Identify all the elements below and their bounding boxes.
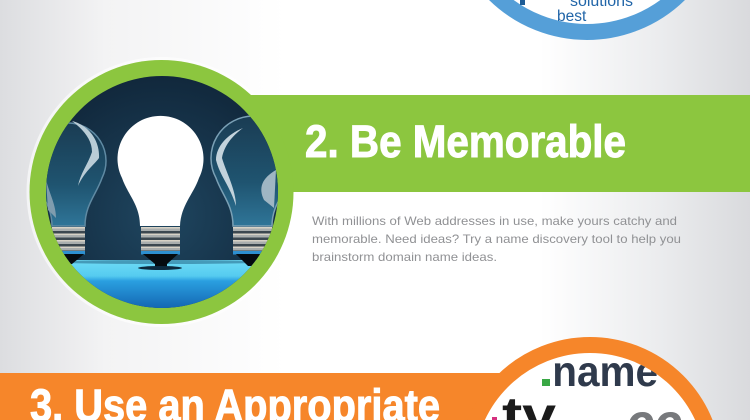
left dim bulb (46, 121, 107, 264)
body text: brainstorm domain name ideas. (312, 250, 497, 264)
floor glow (68, 260, 256, 308)
circle halo (26, 57, 296, 327)
domain: .tv (492, 399, 556, 420)
blue circle: previous section (455, 0, 719, 32)
heading: 2. Be Memorable: 2. Be Memorable (305, 116, 626, 167)
centre lit bulb (118, 116, 204, 270)
green heading band (230, 95, 750, 192)
body text: With millions of Web addresses in use, make yours catchy and (312, 214, 677, 228)
cloud word: best: best (557, 8, 587, 25)
body text: memorable. Need ideas? Try a name discovery tool to help you (312, 232, 681, 246)
body text (312, 214, 681, 264)
domain: .name: .name (541, 348, 658, 396)
orange circle with domain extensions (466, 345, 714, 420)
green circle with light bulb photo (30, 60, 295, 324)
domain: .name (542, 363, 657, 386)
orange heading band (0, 373, 520, 420)
right dim bulb (210, 116, 278, 266)
